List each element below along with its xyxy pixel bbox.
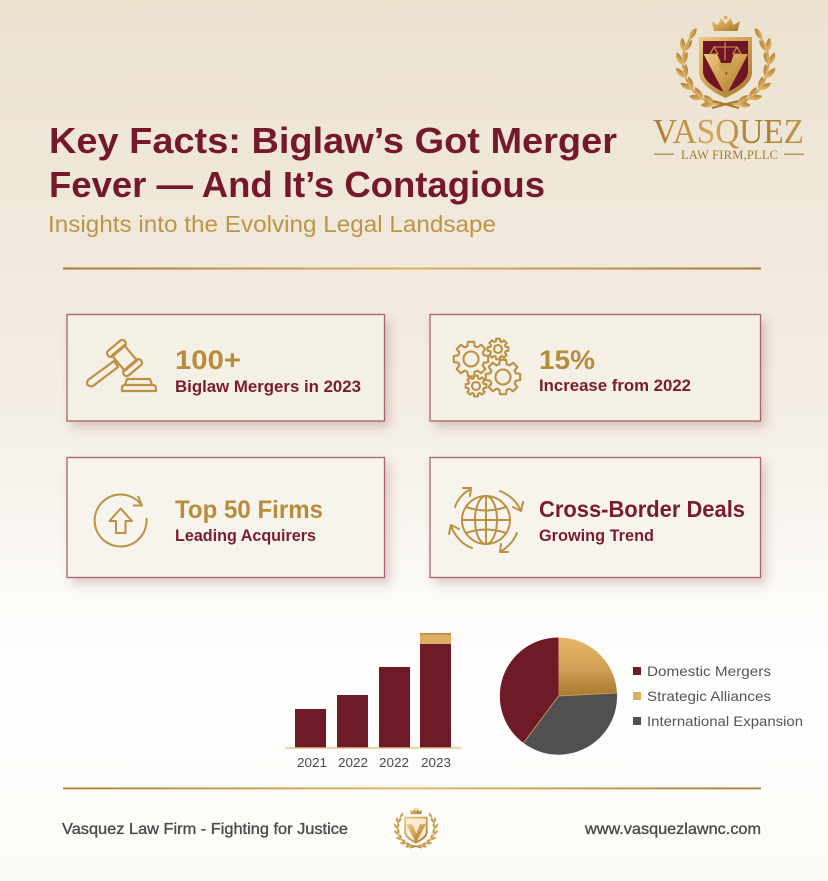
label: Biglaw Mergers in 2023: Biglaw Mergers in 2023 bbox=[175, 377, 361, 396]
panel: 100+ Biglaw Mergers bbox=[67, 314, 384, 421]
bar chart year labels: 2022 bbox=[338, 755, 368, 770]
footer tagline: Vasquez Law Firm - Fighting for Justice bbox=[62, 821, 348, 838]
icon: gears bbox=[454, 339, 520, 396]
bar chart year labels: 2023 bbox=[421, 755, 451, 770]
title: Key Facts: Biglaw’s Got Merger bbox=[49, 120, 617, 161]
pie legend: Strategic Alliances bbox=[647, 688, 771, 704]
label: Increase from 2022: Increase from 2022 bbox=[539, 376, 691, 395]
stat: 15%: 15% bbox=[539, 345, 595, 375]
pie legend: International Expansion bbox=[647, 713, 803, 729]
bar chart year labels: 2021 bbox=[297, 755, 327, 770]
logo emblem bbox=[674, 16, 777, 108]
title bbox=[49, 120, 617, 205]
subtitle: Insights into the Evolving Legal Landsape bbox=[48, 211, 496, 237]
footer website: www.vasquezlawnc.com bbox=[584, 821, 761, 838]
icon: globe with arrows bbox=[449, 488, 523, 552]
footer logo bbox=[393, 807, 439, 848]
label: Leading Acquirers: Leading Acquirers bbox=[175, 526, 316, 545]
title: Fever — And It’s Contagious bbox=[49, 164, 545, 205]
pie legend bbox=[633, 663, 803, 729]
logo wordmark: VASQUEZ bbox=[653, 112, 804, 151]
panel: Top 50 Firms bbox=[67, 458, 384, 578]
heading: Cross-Border Deals: Cross-Border Deals bbox=[539, 496, 745, 522]
panel: Cross-Border Deals bbox=[430, 458, 760, 578]
label: Growing Trend: Growing Trend bbox=[539, 526, 654, 545]
logo: Vasquez Law Firm bbox=[653, 16, 804, 162]
bar chart year labels: 2022 bbox=[379, 755, 409, 770]
panel: 15% increase bbox=[430, 314, 760, 421]
logo sub-line: LAW FIRM,PLLC bbox=[681, 148, 778, 162]
pie chart bbox=[500, 637, 617, 755]
pie legend: Domestic Mergers bbox=[647, 663, 771, 679]
stat: 100+: 100+ bbox=[175, 345, 241, 375]
bar chart year labels bbox=[297, 755, 451, 770]
icon: gavel bbox=[87, 339, 156, 391]
bar chart bbox=[285, 633, 461, 770]
icon: circular arrow with up arrow bbox=[95, 494, 147, 546]
stat: Top 50 Firms: Top 50 Firms bbox=[175, 496, 323, 524]
